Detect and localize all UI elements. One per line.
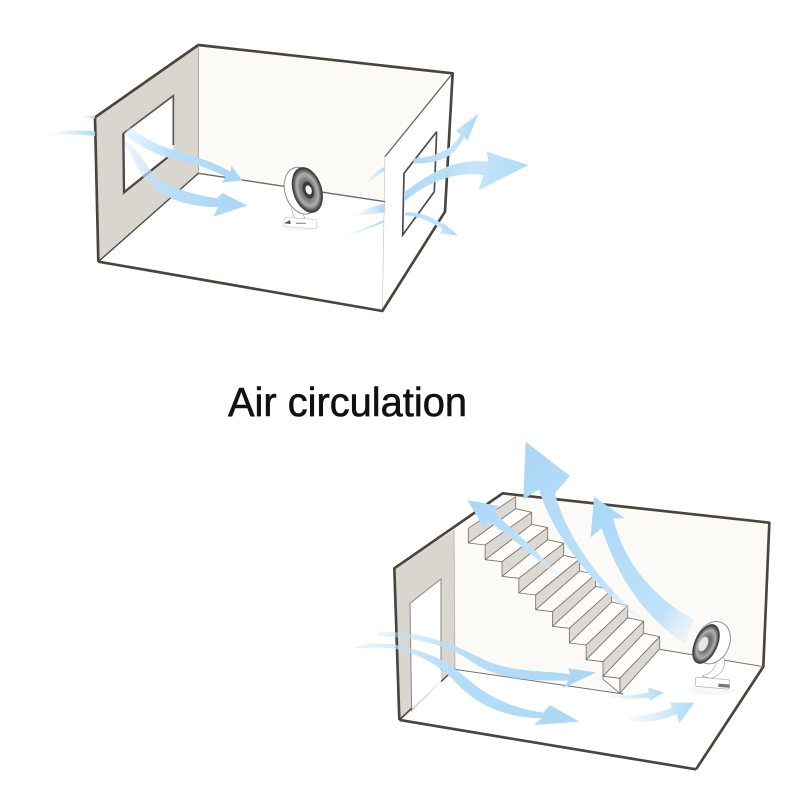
room outline: [95, 45, 453, 311]
back wall: [455, 493, 769, 693]
room outline: [394, 493, 769, 769]
diagram: room with staircase: [353, 442, 769, 769]
staircase: [468, 497, 660, 693]
right wall with window: [382, 73, 453, 311]
diagram: room with two windows: [47, 45, 528, 311]
left wall with door: [394, 530, 455, 720]
icon: fan: [687, 616, 737, 695]
back wall: [198, 45, 453, 202]
arrows: incoming through door: [353, 632, 694, 725]
arrows: rising up the stairs: [467, 442, 694, 644]
title: Air circulation: [228, 379, 467, 425]
arrows: outgoing through right window: [345, 114, 528, 236]
left wall with window: [95, 45, 198, 262]
icon: fan: [278, 163, 328, 231]
arrows: incoming through left window: [47, 116, 247, 217]
